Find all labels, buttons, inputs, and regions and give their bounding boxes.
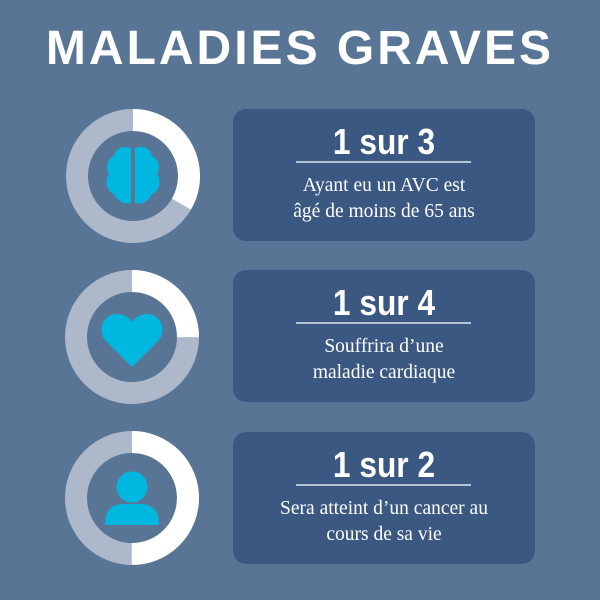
icon: heart	[102, 314, 162, 367]
icon: person	[105, 472, 159, 525]
text	[313, 336, 455, 383]
title: MALADIES GRAVES	[46, 22, 554, 75]
text: Sera atteint d’un cancer au	[280, 498, 488, 519]
donut: 1 sur 4	[76, 281, 188, 393]
text: Ayant eu un AVC est	[303, 175, 465, 196]
donut: 1 sur 2	[76, 442, 188, 554]
box: 1 sur 2	[233, 432, 535, 564]
box: 1 sur 4	[233, 270, 535, 402]
text: cours de sa vie	[326, 524, 442, 545]
stat: 1 sur 4	[333, 282, 435, 323]
donut: 1 sur 3	[77, 120, 189, 232]
text	[293, 175, 475, 222]
text	[280, 498, 488, 545]
icon: brain	[107, 147, 159, 204]
text: Souffrira d’une	[324, 336, 444, 357]
box: 1 sur 3	[233, 109, 535, 241]
text: maladie cardiaque	[313, 362, 455, 383]
stat: 1 sur 2	[333, 444, 435, 485]
text: âgé de moins de 65 ans	[293, 201, 475, 222]
stat: 1 sur 3	[333, 121, 435, 162]
